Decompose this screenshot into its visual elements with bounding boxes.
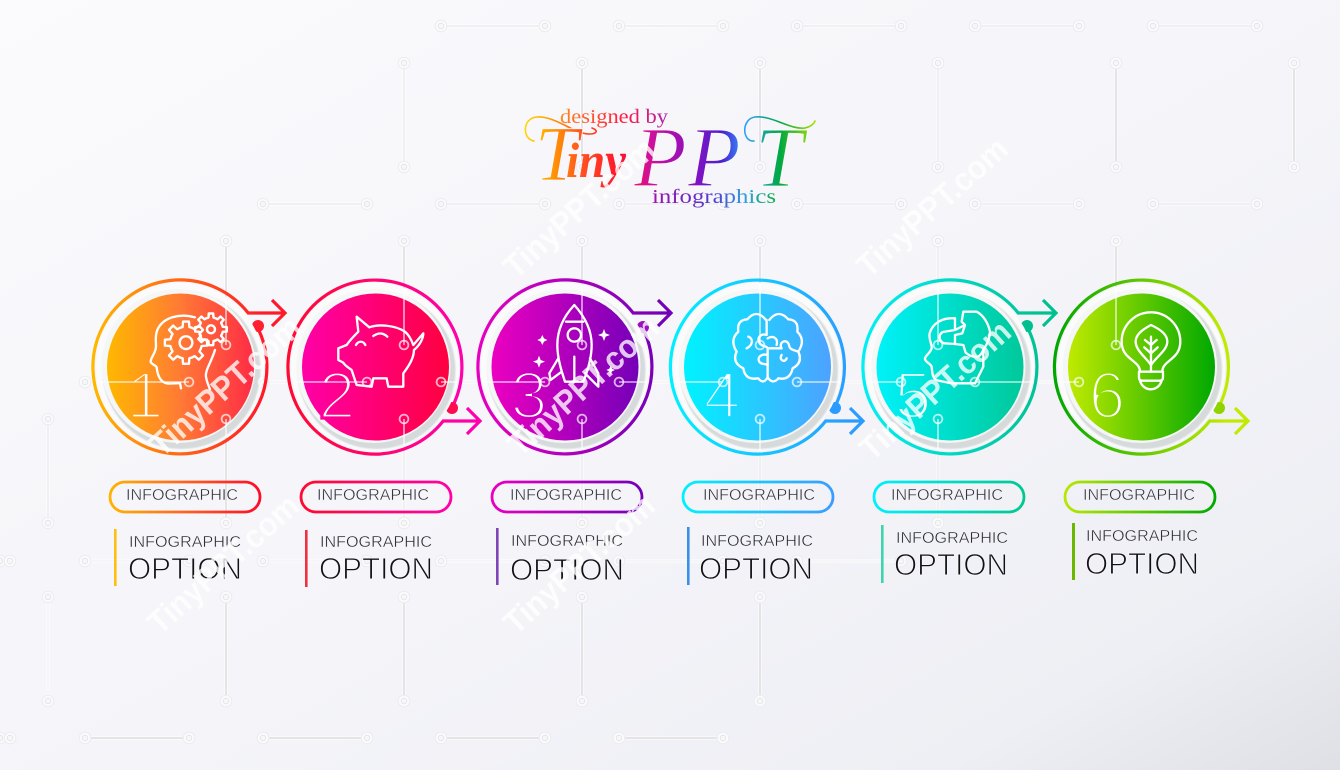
pill 4 (683, 482, 833, 512)
step 1 ring and arrow (93, 280, 285, 454)
step 3 circle (478, 280, 671, 454)
option text block 1: INFOGRAPHIC (129, 534, 241, 551)
icon: piggy bank (338, 317, 423, 387)
option text block 3: OPTION (510, 552, 624, 587)
white grid overlay on the circles (103, 284, 1121, 450)
pill 3 (492, 482, 642, 512)
icon: head with puzzle (925, 312, 990, 383)
step 4 ring and arrow (670, 280, 863, 454)
watermarks: TinyPPT.com (142, 309, 308, 463)
step 3 ring and arrow (478, 280, 671, 454)
step 6 ring and arrow (1054, 280, 1248, 454)
option text block 1: OPTION (128, 551, 242, 586)
logo letters: iny: iny (566, 132, 627, 188)
watermarks: TinyPPT.com (496, 487, 662, 641)
icon: puzzle brain (733, 314, 802, 381)
pill 3: INFOGRAPHIC (510, 487, 622, 504)
step 2 ring and arrow (288, 280, 480, 454)
pill 1: INFOGRAPHIC (126, 487, 238, 504)
option text block 6: OPTION (1085, 546, 1199, 581)
option text block 6 (1072, 523, 1199, 581)
icon: light bulb with leaf (1122, 312, 1180, 389)
pill 6 (1065, 482, 1215, 512)
step 4 number: 4 (704, 358, 740, 432)
step 2 number: 2 (319, 358, 355, 432)
logo word: PPT: T (755, 109, 808, 205)
option text block 1 (114, 529, 242, 586)
watermarks: TinyPPT.com (496, 131, 662, 285)
logo letter: T: T (535, 110, 583, 197)
pill 4: INFOGRAPHIC (703, 487, 815, 504)
pill 6: INFOGRAPHIC (1083, 487, 1195, 504)
option text block 5 (881, 525, 1008, 583)
logo word: PPT: P (687, 109, 741, 205)
option text block 2: INFOGRAPHIC (320, 534, 432, 551)
option text block 4 (687, 527, 813, 586)
icon: rocket (533, 305, 615, 387)
logo swash (525, 117, 596, 141)
pill 2: INFOGRAPHIC (317, 487, 429, 504)
option text block 6: INFOGRAPHIC (1086, 528, 1198, 545)
option text block 2 (305, 530, 433, 587)
option text block 5: INFOGRAPHIC (896, 530, 1008, 547)
option text block 4: OPTION (699, 551, 813, 586)
label pills (110, 482, 1215, 512)
step 5 number: 5 (895, 358, 931, 432)
pill 1 (110, 482, 260, 512)
step 4 circle (670, 280, 863, 454)
pill 2 (301, 482, 451, 512)
option text block 5: OPTION (894, 547, 1008, 582)
pill 5: INFOGRAPHIC (891, 487, 1003, 504)
option text block 3 (496, 528, 624, 587)
logo line: designed by: designed by (560, 106, 669, 128)
step 5 ring and arrow (863, 280, 1056, 454)
logo: designed by TinyPPT infographics (525, 106, 815, 208)
watermarks: TinyPPT.com (500, 309, 666, 463)
watermarks: TinyPPT.com (849, 130, 1015, 284)
pill 5 (874, 482, 1024, 512)
logo word: PPT: P (633, 109, 687, 205)
option text block 3: INFOGRAPHIC (511, 533, 623, 550)
step 5 circle (863, 280, 1056, 454)
step 6 number: 6 (1089, 358, 1125, 432)
step 6 circle (1054, 280, 1248, 454)
watermarks: TinyPPT.com (140, 487, 306, 641)
step 1 number: 1 (127, 358, 163, 432)
step 1 circle (93, 280, 285, 454)
logo T swash (745, 117, 815, 141)
step 3 number: 3 (511, 358, 547, 432)
step 2 circle (288, 280, 480, 454)
logo line: infographics: infographics (652, 186, 776, 208)
watermarks: TinyPPT.com (852, 313, 1018, 467)
icon: head with gears (151, 313, 227, 389)
watermarks (140, 130, 1018, 641)
option text block 2: OPTION (319, 551, 433, 586)
option text block 4: INFOGRAPHIC (701, 533, 813, 550)
